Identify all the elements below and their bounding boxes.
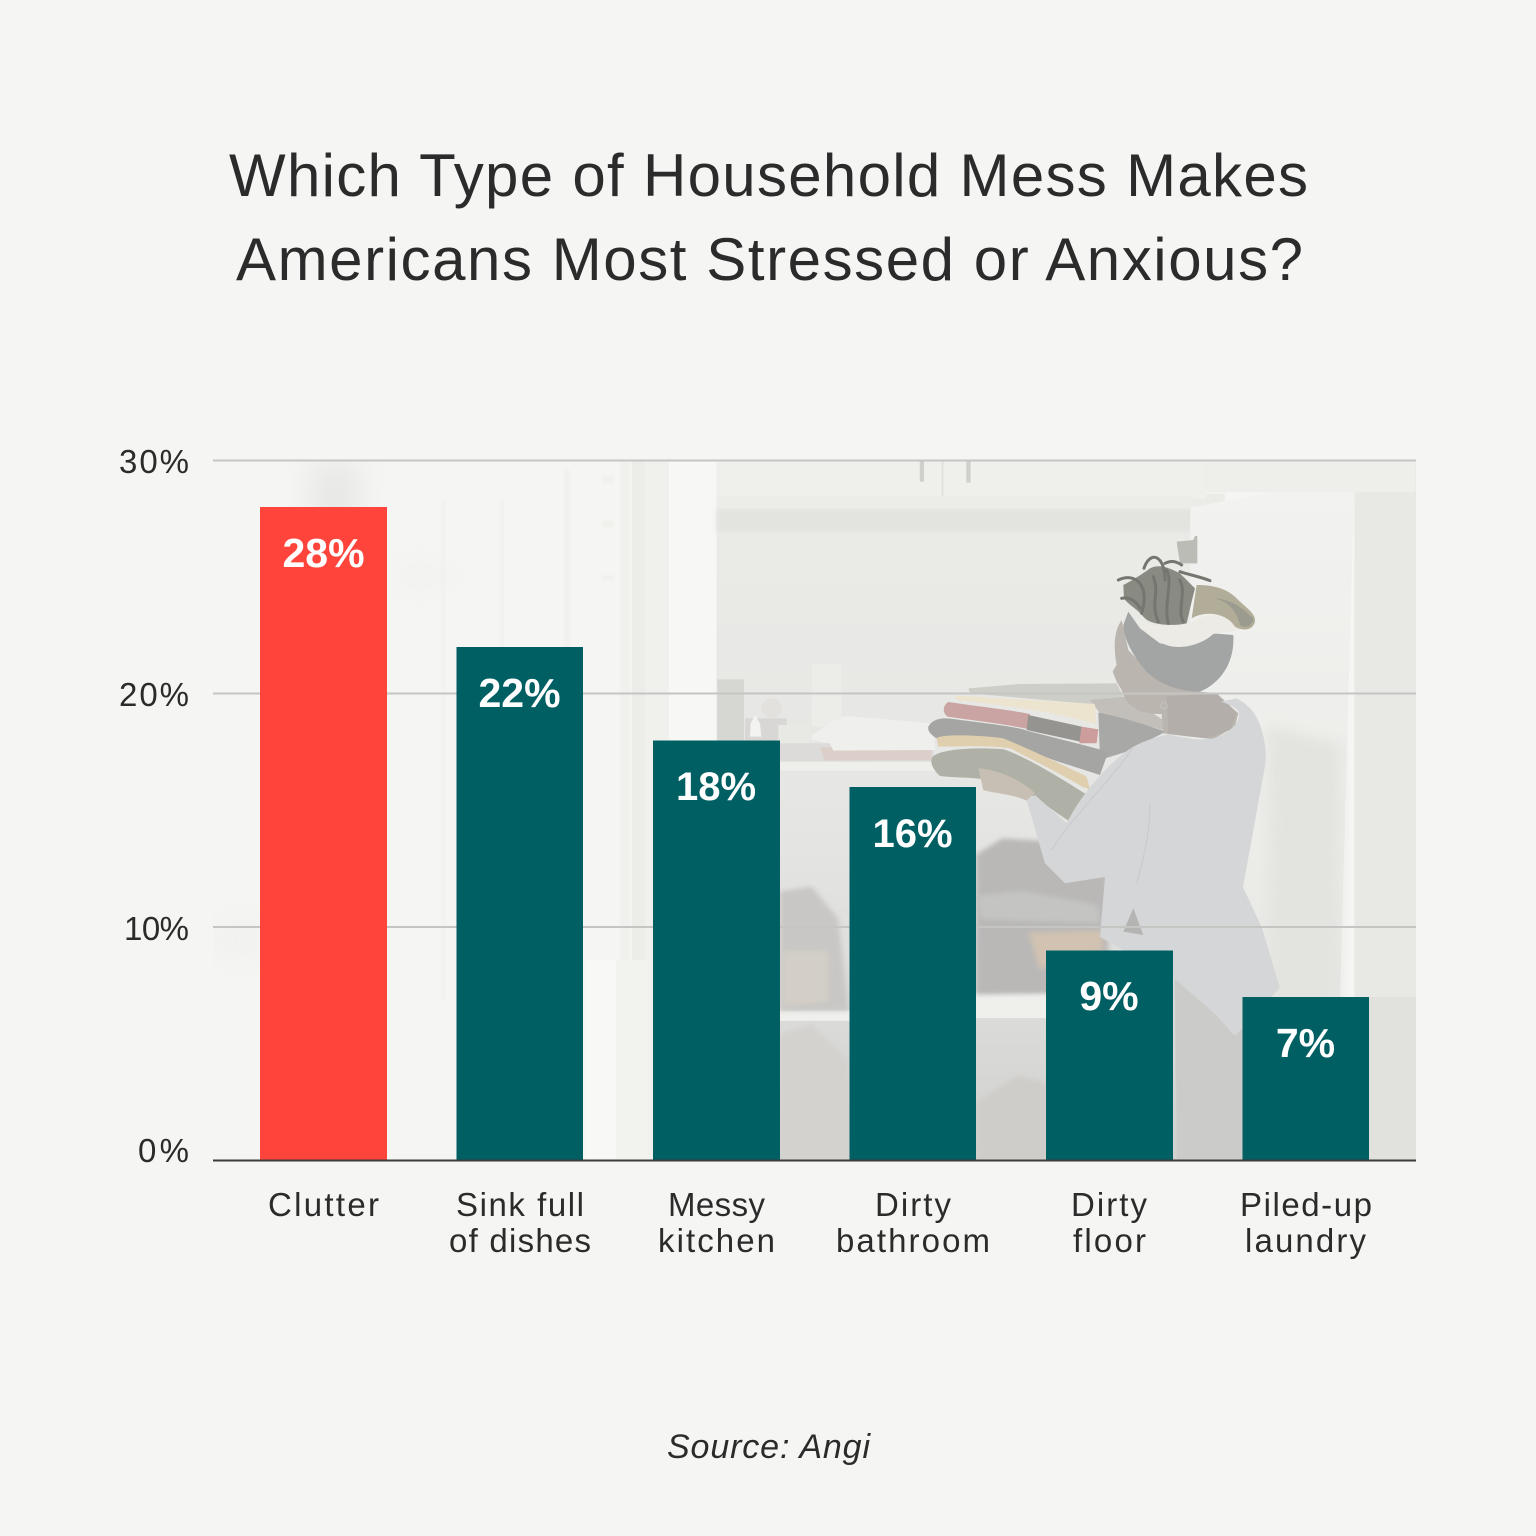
bar: Piled-up laundry 7%: 7% — [1276, 1020, 1335, 1066]
category labels: floor — [1073, 1222, 1146, 1259]
white band — [1137, 610, 1241, 647]
bar: Messy kitchen 18%: 18% — [676, 765, 756, 809]
category labels: Messy — [668, 1186, 766, 1223]
bar: Dirty bathroom 16%: 16% — [872, 812, 953, 856]
closet interior — [716, 494, 1225, 1160]
head wrap — [1123, 612, 1233, 692]
bar: Dirty bathroom 16% — [850, 787, 976, 1160]
black layer — [928, 718, 1108, 775]
x axis baseline — [213, 1160, 1416, 1162]
sweater — [1027, 698, 1280, 1036]
category labels — [268, 1186, 1372, 1259]
bar: Clutter 28%: 28% — [282, 530, 365, 576]
earring — [1161, 702, 1167, 709]
category labels: Dirty — [1071, 1186, 1148, 1223]
bar: Dirty floor 9% — [1046, 950, 1173, 1160]
category labels: Dirty — [875, 1186, 952, 1223]
source note: Source: Angi — [667, 1428, 871, 1466]
y axis labels: 10% — [124, 910, 189, 947]
far sleeve — [1098, 713, 1166, 760]
hand — [978, 768, 1035, 801]
category labels: Clutter — [268, 1186, 379, 1223]
tan layer — [937, 735, 1090, 789]
shelf items — [717, 663, 935, 771]
hinge — [1177, 536, 1197, 563]
category labels: of dishes — [449, 1222, 591, 1259]
olive layer — [931, 748, 1090, 822]
legs — [1174, 979, 1256, 1160]
title — [229, 142, 1308, 293]
category labels: Sink full — [456, 1186, 584, 1223]
faded photo: woman arranging clothes in a closet — [213, 460, 1418, 1160]
neck — [1167, 693, 1237, 738]
y axis labels: 0% — [138, 1132, 189, 1169]
skin — [1113, 620, 1238, 739]
bar: Sink full of dishes 22%: 22% — [478, 670, 561, 716]
title: Which Type of Household Mess Makes — [229, 142, 1308, 209]
lower shelves — [780, 1011, 851, 1021]
category labels: kitchen — [658, 1222, 775, 1259]
far pile of clothes — [968, 683, 1123, 704]
left door strip — [632, 460, 648, 1160]
y axis labels — [119, 443, 189, 1169]
category labels: bathroom — [836, 1222, 990, 1259]
hair — [1123, 566, 1195, 625]
right wall — [1354, 460, 1418, 1160]
bar: Piled-up laundry 7% — [1242, 997, 1369, 1160]
scarf knot — [1192, 585, 1255, 629]
right door — [1190, 478, 1354, 1160]
bar: Dirty floor 9%: 9% — [1079, 973, 1139, 1019]
woman with folded clothes — [928, 536, 1280, 1036]
top cabinet — [716, 460, 1206, 499]
category labels: laundry — [1245, 1222, 1366, 1259]
y axis labels: 20% — [119, 676, 189, 713]
red layer — [944, 702, 1030, 729]
bar: Clutter 28% — [260, 507, 387, 1160]
cream layer — [955, 696, 1096, 724]
bar: Messy kitchen 18% — [653, 740, 780, 1160]
title: Americans Most Stressed or Anxious? — [236, 226, 1303, 293]
category labels: Piled-up — [1240, 1186, 1372, 1223]
gridlines — [213, 460, 1416, 927]
bar: Sink full of dishes 22% — [456, 647, 583, 1160]
y axis labels: 30% — [119, 443, 189, 480]
